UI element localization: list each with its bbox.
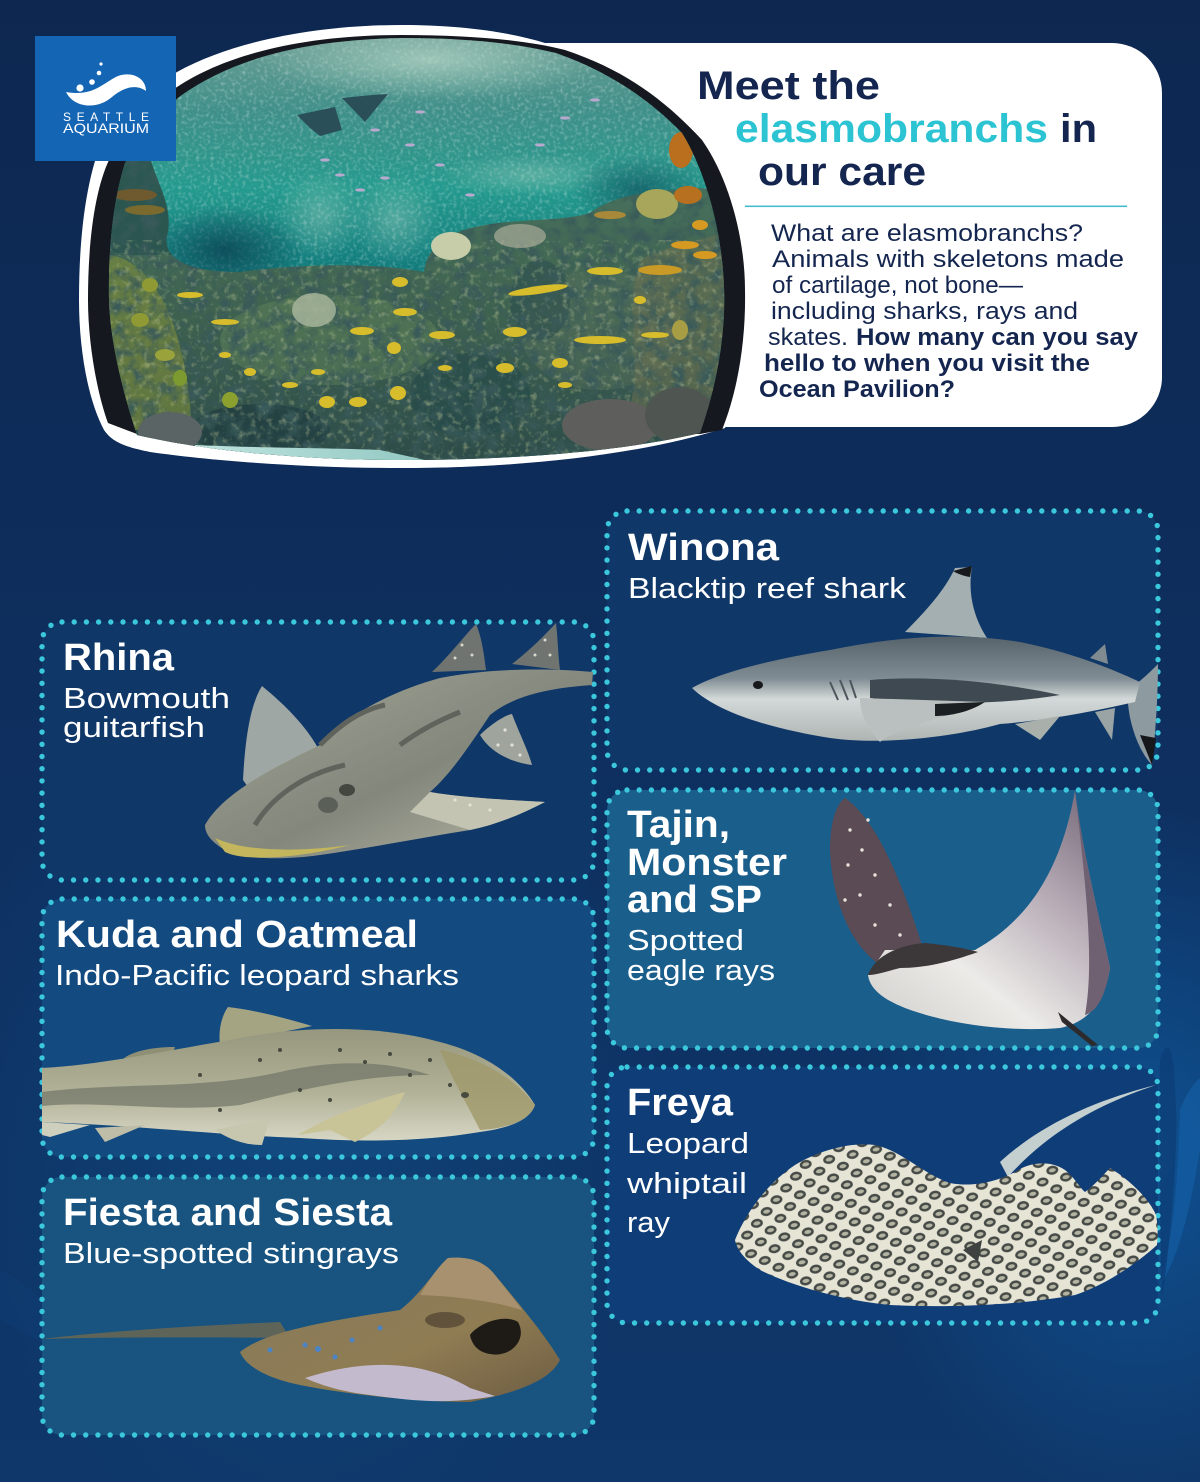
intro paragraph: skates.	[768, 324, 848, 351]
species name	[63, 683, 230, 744]
species name: Leopard	[627, 1128, 749, 1160]
intro paragraph: including sharks, rays and	[771, 298, 1078, 325]
bowmouth guitarfish	[205, 623, 593, 858]
panel: Rhina	[42, 622, 594, 880]
spotted eagle ray	[830, 790, 1110, 1046]
corals	[131, 211, 717, 408]
leopard shark	[42, 1007, 535, 1145]
panel: Fiesta and Siesta	[42, 1177, 594, 1435]
species name: whiptail	[626, 1168, 747, 1200]
panel: Winona	[607, 511, 1158, 770]
intro paragraph: Animals with skeletons made	[772, 246, 1124, 273]
small fish	[320, 98, 600, 197]
intro paragraph: hello to when you visit the	[764, 350, 1090, 377]
species name: ray	[627, 1207, 671, 1239]
intro paragraph: of cartilage, not bone—	[772, 272, 1023, 299]
intro paragraph: How many can you say	[856, 324, 1139, 351]
blue-spotted stingray	[42, 1258, 560, 1402]
rays in the water	[297, 107, 342, 136]
panel: Kuda and Oatmeal	[42, 899, 594, 1157]
heading: Monster	[627, 842, 787, 884]
intro paragraph: What are elasmobranchs?	[771, 220, 1083, 247]
heading: Rhina	[63, 637, 175, 679]
species name: Blue-spotted stingrays	[63, 1238, 399, 1270]
heading: Winona	[628, 527, 780, 569]
species name: Bowmouth	[63, 683, 230, 715]
species name: Spotted	[627, 925, 744, 957]
title: our care	[758, 150, 926, 194]
rocks and boulders	[431, 232, 471, 260]
species name: Indo-Pacific leopard sharks	[55, 960, 459, 992]
species name: guitarfish	[63, 712, 205, 744]
title: in	[1060, 107, 1097, 151]
heading: Fiesta and Siesta	[63, 1192, 393, 1234]
logo: SEATTLE	[63, 110, 149, 124]
title: elasmobranchs	[735, 107, 1048, 151]
species name	[626, 1128, 749, 1239]
heading: and SP	[627, 879, 762, 921]
logo	[35, 36, 176, 161]
logo: AQUARIUM	[63, 120, 149, 136]
sand	[194, 445, 425, 460]
header text card	[500, 43, 1162, 427]
heading: Freya	[627, 1082, 734, 1124]
panel: Freya	[607, 1067, 1158, 1323]
title	[697, 64, 1097, 194]
leopard whiptail ray	[735, 1085, 1158, 1306]
species name: Blacktip reef shark	[628, 573, 907, 605]
title: Meet the	[697, 64, 880, 108]
blacktip reef shark	[692, 566, 1158, 765]
aquarium window photo	[79, 20, 748, 470]
intro paragraph	[759, 220, 1139, 403]
species name: eagle rays	[627, 955, 775, 987]
panel: Tajin, Monster and SP	[607, 790, 1158, 1048]
rock walls	[108, 161, 724, 460]
species name	[627, 925, 775, 987]
background coral silhouettes	[0, 1048, 1200, 1360]
heading: Tajin,	[627, 804, 730, 846]
heading: Kuda and Oatmeal	[56, 914, 418, 956]
icon: wave and bubbles	[66, 62, 146, 106]
intro paragraph: Ocean Pavilion?	[759, 376, 955, 403]
heading	[627, 804, 787, 921]
